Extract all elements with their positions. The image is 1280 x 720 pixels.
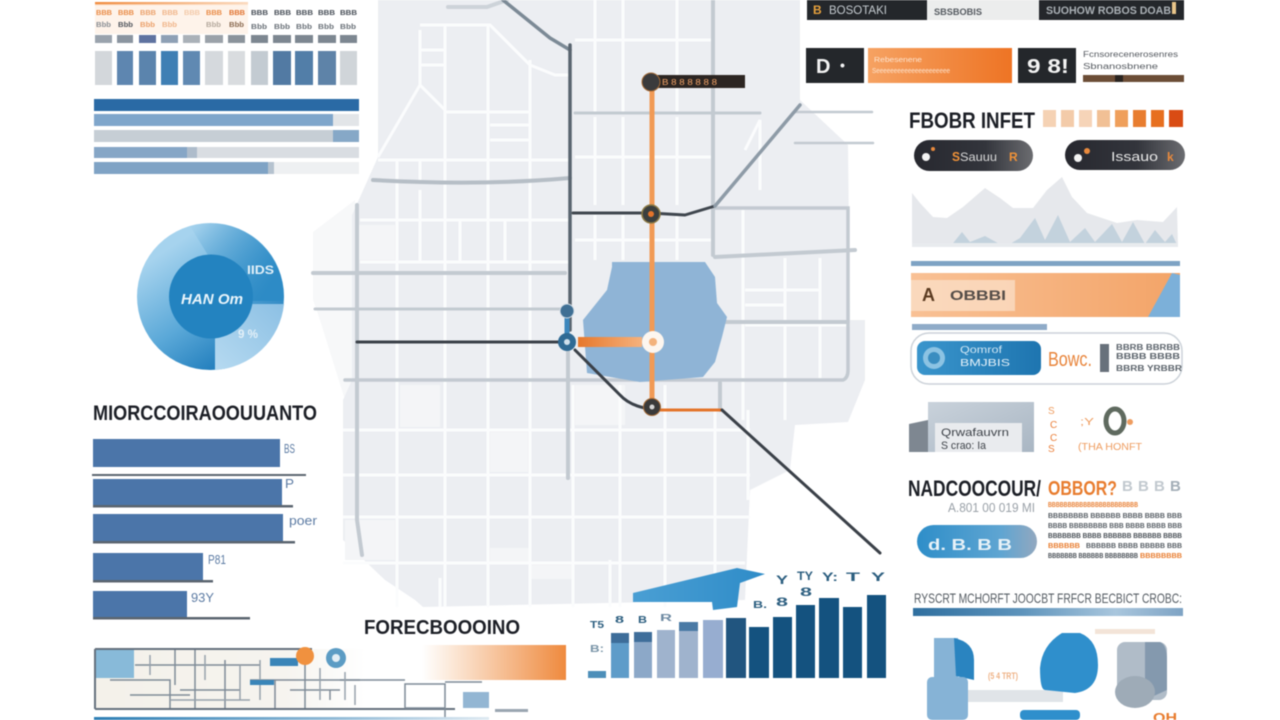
text block: lower right paragraph: BBBBBB	[1048, 543, 1080, 550]
pill: left: S	[952, 149, 960, 164]
note: orange text with ring icon: C	[1050, 433, 1057, 444]
legend: orange swatches	[1043, 110, 1183, 127]
table header text: Bbb	[318, 24, 334, 31]
bar values: poer	[289, 513, 318, 528]
bar labels: Y	[871, 570, 885, 584]
stat row: top right: Sbnanosbnene	[1083, 62, 1159, 71]
map: central blue district	[583, 262, 727, 382]
connector: grey	[968, 690, 1063, 702]
chart: vertical bars, bottom centre	[588, 568, 886, 678]
shape: grey cluster	[1115, 642, 1167, 708]
stat row: top right	[806, 48, 1184, 83]
stat row: top right: •	[840, 57, 845, 73]
table header text: Bbb	[206, 22, 221, 29]
donut centre label: HAN Om	[181, 291, 243, 308]
schematic blue nodes	[250, 658, 298, 685]
bar values	[191, 441, 318, 605]
line: orange horizontal	[578, 337, 642, 347]
legend: grey chips	[1122, 478, 1181, 495]
table header text: BBB	[184, 10, 200, 17]
divider bar: short	[912, 324, 1047, 330]
schematic small square	[463, 692, 489, 708]
stat row: top right: Seeeeeeeeeeeeeeeeeeeee	[872, 68, 950, 75]
map label: top station tag	[642, 73, 745, 91]
line: dark vertical	[568, 45, 572, 330]
bar values: 93Y	[191, 590, 214, 605]
heading: left bar chart: MIORCCOIRAOOUUANTO	[93, 402, 317, 425]
line: east branch	[573, 206, 715, 215]
bar labels: Y:	[822, 570, 838, 584]
stat row: top right: Rebesenene	[874, 57, 922, 64]
line: dark horizontal west	[357, 340, 565, 344]
pill: right: k	[1167, 150, 1174, 164]
text block: lower right paragraph: BBBBBB BBBB BBBBB BBB	[1086, 543, 1182, 550]
donut value labels: IIDS	[247, 263, 274, 277]
bar labels: 8	[615, 615, 625, 626]
table chips	[95, 35, 357, 43]
shape: blue rounded blob	[1040, 633, 1098, 693]
card: blue info: BBRB YRBBR	[1116, 364, 1182, 373]
table header text: Bbb	[251, 24, 267, 31]
bar values: P	[285, 476, 294, 491]
bar labels: R	[660, 613, 673, 624]
text block: lower right paragraph: BBBBBBBBBBBBBBBBBBBBBBB	[1048, 502, 1138, 509]
table header text: BBB	[162, 10, 178, 17]
line: blue link	[564, 312, 570, 340]
donut value labels	[238, 263, 274, 341]
table header text: BBB	[296, 10, 313, 17]
card: blue info: Bowc.	[1048, 349, 1092, 371]
donut value labels: 9 %	[238, 327, 258, 341]
bar labels: B	[638, 615, 647, 626]
table header text: BBB	[96, 10, 112, 17]
table header text: BBB	[206, 10, 222, 17]
bar labels	[590, 569, 885, 655]
bar labels: T5	[590, 620, 605, 631]
pill: right: Issauo	[1111, 149, 1158, 164]
bar: segmented blue	[913, 608, 1183, 616]
heading: right inset: FBOBR INFET	[909, 108, 1035, 133]
heading: lower right: NADCOOCOUR/	[908, 476, 1041, 501]
shape: blue box bottom	[1020, 710, 1080, 720]
pill: left: Sauuu	[960, 150, 997, 164]
map: minor roads	[313, 0, 873, 555]
table header text: Bbb	[118, 22, 133, 29]
table header text: BBB	[118, 10, 134, 17]
line: grey north-east diagonal	[715, 105, 800, 206]
schematic blue ring	[326, 648, 346, 668]
map node: centre north	[642, 205, 660, 223]
text block: lower right paragraph: BBBBBBBB BBBBBB BBBB BBBB BBB	[1048, 513, 1182, 520]
area: blue series	[950, 215, 1178, 247]
subheading: grey value: A.801 00 019 MI	[948, 500, 1035, 515]
card: grey note	[909, 402, 1034, 452]
icon: ring	[1106, 409, 1124, 433]
map: block tone variations	[345, 225, 625, 579]
map node: south	[644, 398, 660, 416]
table header text: BBB	[140, 10, 156, 17]
bar values: BS	[284, 441, 295, 456]
line: orange vertical	[650, 85, 654, 405]
bar labels: B.	[753, 600, 767, 611]
stat row: top right: 9 8!	[1027, 56, 1069, 78]
bar labels: TY	[797, 569, 813, 583]
line: south-east diagonal	[722, 410, 880, 553]
table header text: BBB	[229, 10, 245, 17]
bar labels: 8	[800, 585, 813, 599]
chart: left horizontal bars	[92, 439, 318, 620]
diagram: bottom right shapes	[927, 629, 1177, 720]
table colour blocks	[95, 51, 357, 85]
card: blue info	[911, 333, 1182, 384]
map node: blue interchange	[558, 304, 576, 351]
bar values: P81	[208, 552, 226, 567]
heading: orange: OBBOR?	[1048, 478, 1117, 500]
map: street grid background	[313, 0, 873, 607]
table header text: Bbb	[274, 24, 290, 31]
chart: top-left stacked horizontal bars	[94, 99, 359, 174]
pill: blue metric: d. B. B B	[928, 537, 1012, 554]
schematic orange marker	[296, 647, 314, 665]
label: orange note: (5 4 TRT)	[988, 671, 1018, 681]
table header text: BBB	[251, 10, 268, 17]
chart: mountain area	[912, 177, 1178, 247]
stat row: top right: D	[816, 56, 830, 78]
header strip: top right	[807, 0, 1184, 20]
note: orange text with ring icon: (THA HONFT	[1078, 442, 1142, 453]
diagram: bottom network schematic	[95, 647, 528, 720]
text block: lower right paragraph	[1048, 502, 1182, 560]
stat row: top right: Fcnsorecenerosenres	[1083, 50, 1178, 59]
gradient band: orange	[422, 645, 566, 680]
note: orange text with ring icon: S	[1048, 406, 1055, 417]
bar labels: Y	[776, 573, 788, 587]
map node: white centre	[642, 331, 664, 353]
table header text: Bbb	[96, 22, 111, 29]
blue arrow shape	[633, 568, 765, 610]
legend: grey chips: B	[1154, 478, 1165, 495]
header strip: top right: BOSOTAKI	[829, 3, 887, 17]
bar underlines	[92, 474, 306, 620]
callout: orange banner: OBBBI	[950, 287, 1006, 303]
table header text	[96, 10, 357, 31]
pill: blue metric	[917, 525, 1037, 558]
bar labels: 8	[776, 595, 789, 609]
card: blue info: BBBB BBBB	[1116, 352, 1180, 361]
legend: grey chips: B	[1170, 478, 1181, 495]
card: blue info: Qomrof	[960, 345, 1002, 356]
note: orange text with ring icon: ;Y	[1080, 417, 1094, 428]
donut segment: light lower right	[215, 304, 284, 370]
pill: left	[914, 140, 1033, 171]
table header text: BBB	[274, 10, 291, 17]
text block: lower right paragraph: BBBBBBBB	[1140, 553, 1182, 560]
card: blue info: BBRB BBRBB	[1116, 343, 1180, 352]
line: orange south segment	[655, 408, 722, 412]
text block: lower right paragraph: BBBBBBB BBBB BBBBBB BBBBBB BBBB	[1048, 533, 1182, 540]
table header text: Bbb	[229, 22, 244, 29]
pill: right	[1065, 140, 1185, 170]
line: grey upper diagonal	[503, 0, 570, 50]
donut centre	[169, 254, 253, 338]
map: transit lines	[357, 0, 880, 553]
bar labels: B:	[590, 644, 604, 655]
legend: grey chips: B	[1138, 478, 1149, 495]
table header text: Bbb	[140, 22, 155, 29]
schematic connector	[495, 709, 528, 712]
card: blue info: BMJBIS	[960, 358, 1010, 369]
callout: orange banner: A	[922, 285, 935, 305]
bars light group	[588, 620, 723, 678]
bar labels: T	[846, 570, 861, 584]
table header text: Bbb	[162, 22, 177, 29]
table header text: Bbb	[340, 24, 356, 31]
shape: blue box lower-left	[927, 677, 968, 720]
header strip: top right: SUOHOW ROBOS DOAB	[1046, 5, 1171, 17]
line: south-west diagonal	[575, 350, 650, 409]
text block: lower right paragraph: BBBBBBB BBBBBB BBBBBBBB	[1048, 553, 1138, 560]
table header text: Bbb	[296, 24, 312, 31]
header strip: top right: B	[813, 3, 822, 17]
note: orange text with ring icon: C	[1050, 420, 1057, 431]
donut segment: upper right	[190, 223, 284, 301]
shape: blue box top-left	[934, 638, 974, 680]
bars dark group	[726, 595, 886, 678]
heading: lower right caption: RYSCRT MCHORFT JOOCBT FRFCR BECBICT CROBC:	[914, 590, 1182, 606]
pill: left: R	[1009, 150, 1018, 164]
chart: donut	[137, 223, 284, 370]
bar: bottom edge	[94, 717, 489, 720]
header strip: top right: SBSBOBIS	[934, 7, 982, 17]
label: faint tag	[1095, 629, 1155, 634]
text block: lower right paragraph: BBBB BBBBBBBB BBB BBBB BBBB BBB	[1048, 523, 1182, 530]
panel: top-left comparison table	[95, 2, 357, 85]
callout: orange banner	[911, 273, 1180, 317]
schematic wiring	[110, 650, 482, 720]
divider bar: right	[911, 261, 1180, 266]
map: white streets	[343, 0, 850, 607]
legend: grey chips: B	[1122, 478, 1133, 495]
table header text: BBB	[318, 10, 335, 17]
card: grey note: S crao: Ia	[941, 440, 987, 452]
note: orange text with ring icon	[1048, 406, 1142, 455]
note: orange text with ring icon: S	[1048, 444, 1055, 455]
card: grey note: Qrwafauvrn	[941, 427, 1009, 439]
table header text: BBB	[340, 10, 357, 17]
map label: top station tag: B 8 8 8 8 8 8	[662, 78, 718, 87]
heading: forecasting: FORECBOOOINO	[364, 617, 520, 639]
